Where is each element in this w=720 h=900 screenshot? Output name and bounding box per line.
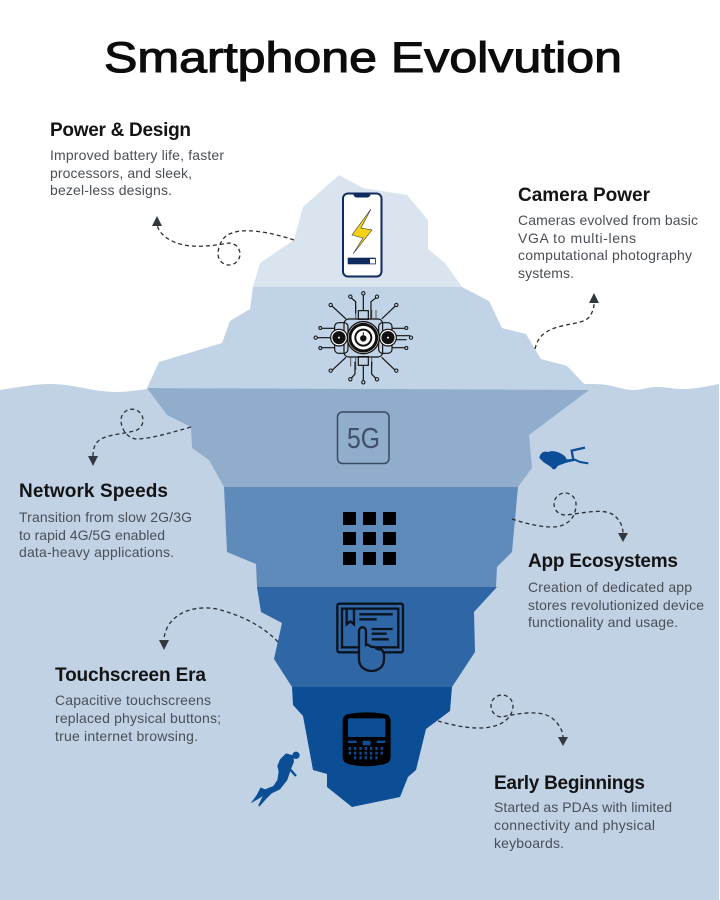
text block: network speeds: to rapid 4G/5G enabled	[19, 527, 165, 543]
iceberg tier: touchscreen	[257, 587, 497, 687]
text block: touchscreen era: replaced physical buttons;	[55, 710, 221, 726]
iceberg tier: camera	[147, 287, 589, 389]
icon: touchscreen tablet with hand	[337, 604, 403, 671]
water background	[0, 384, 719, 900]
text block: network speeds: data-heavy applications.	[19, 544, 174, 560]
text block: power and design: processors, and sleek,	[50, 165, 192, 181]
text block: power and design: bezel-less designs.	[50, 182, 172, 198]
text block: app ecosystems: stores revolutionized device	[528, 597, 704, 613]
icon: diver left	[251, 752, 300, 807]
text block: network speeds	[19, 481, 192, 560]
text block: camera power: VGA to multi-lens	[518, 230, 636, 246]
text block: camera power: Camera Power	[518, 185, 651, 206]
iceberg tier: power and design	[253, 175, 462, 287]
iceberg tier: network	[147, 388, 589, 487]
text block: power and design: Power & Design	[50, 120, 191, 141]
text block: camera power: Cameras evolved from basic	[518, 212, 698, 228]
text block: camera power: computational photography	[518, 247, 692, 263]
text block: early beginnings	[494, 773, 672, 851]
icon: diver right	[539, 448, 588, 469]
title: Smartphone Evolvution	[104, 34, 622, 82]
text block: power and design	[50, 120, 224, 198]
text block: early beginnings: Started as PDAs with limited	[494, 799, 672, 815]
icon: 5G badge: 5G	[347, 423, 380, 455]
text block: touchscreen era: Touchscreen Era	[55, 665, 206, 686]
icon: early keyboard phone	[343, 712, 391, 766]
icon: phone with lightning bolt	[343, 194, 382, 276]
text block: app ecosystems: functionality and usage.	[528, 614, 678, 630]
text block: camera power	[518, 185, 698, 281]
text block: app ecosystems	[528, 551, 704, 630]
text block: early beginnings: keyboards.	[494, 835, 564, 851]
text block: early beginnings: Early Beginnings	[494, 773, 645, 794]
arrow: network speeds	[88, 409, 191, 466]
arrow: camera power	[535, 293, 599, 349]
text block: touchscreen era	[55, 665, 221, 744]
arrow: early beginnings	[438, 695, 568, 746]
text block: early beginnings: connectivity and physical	[494, 817, 655, 833]
icon: app grid	[343, 512, 396, 565]
icon: camera lens circuit	[314, 292, 413, 384]
text block: camera power: systems.	[518, 265, 574, 281]
arrow: touchscreen era	[159, 608, 278, 650]
text block: network speeds: Transition from slow 2G/3G	[19, 509, 192, 525]
iceberg tier: early	[292, 687, 452, 807]
arrow: power and design	[152, 216, 294, 265]
iceberg tier: apps	[224, 487, 518, 587]
arrow: app ecosystems	[512, 493, 628, 542]
text block: network speeds: Network Speeds	[19, 481, 168, 502]
text block: power and design: Improved battery life, faster	[50, 147, 224, 163]
iceberg	[147, 175, 589, 807]
icon: 5G badge	[338, 412, 389, 464]
text block: touchscreen era: Capacitive touchscreens	[55, 692, 211, 708]
text block: app ecosystems: Creation of dedicated app	[528, 579, 692, 595]
text block: app ecosystems: App Ecosystems	[528, 551, 678, 572]
text block: touchscreen era: true internet browsing.	[55, 728, 198, 744]
